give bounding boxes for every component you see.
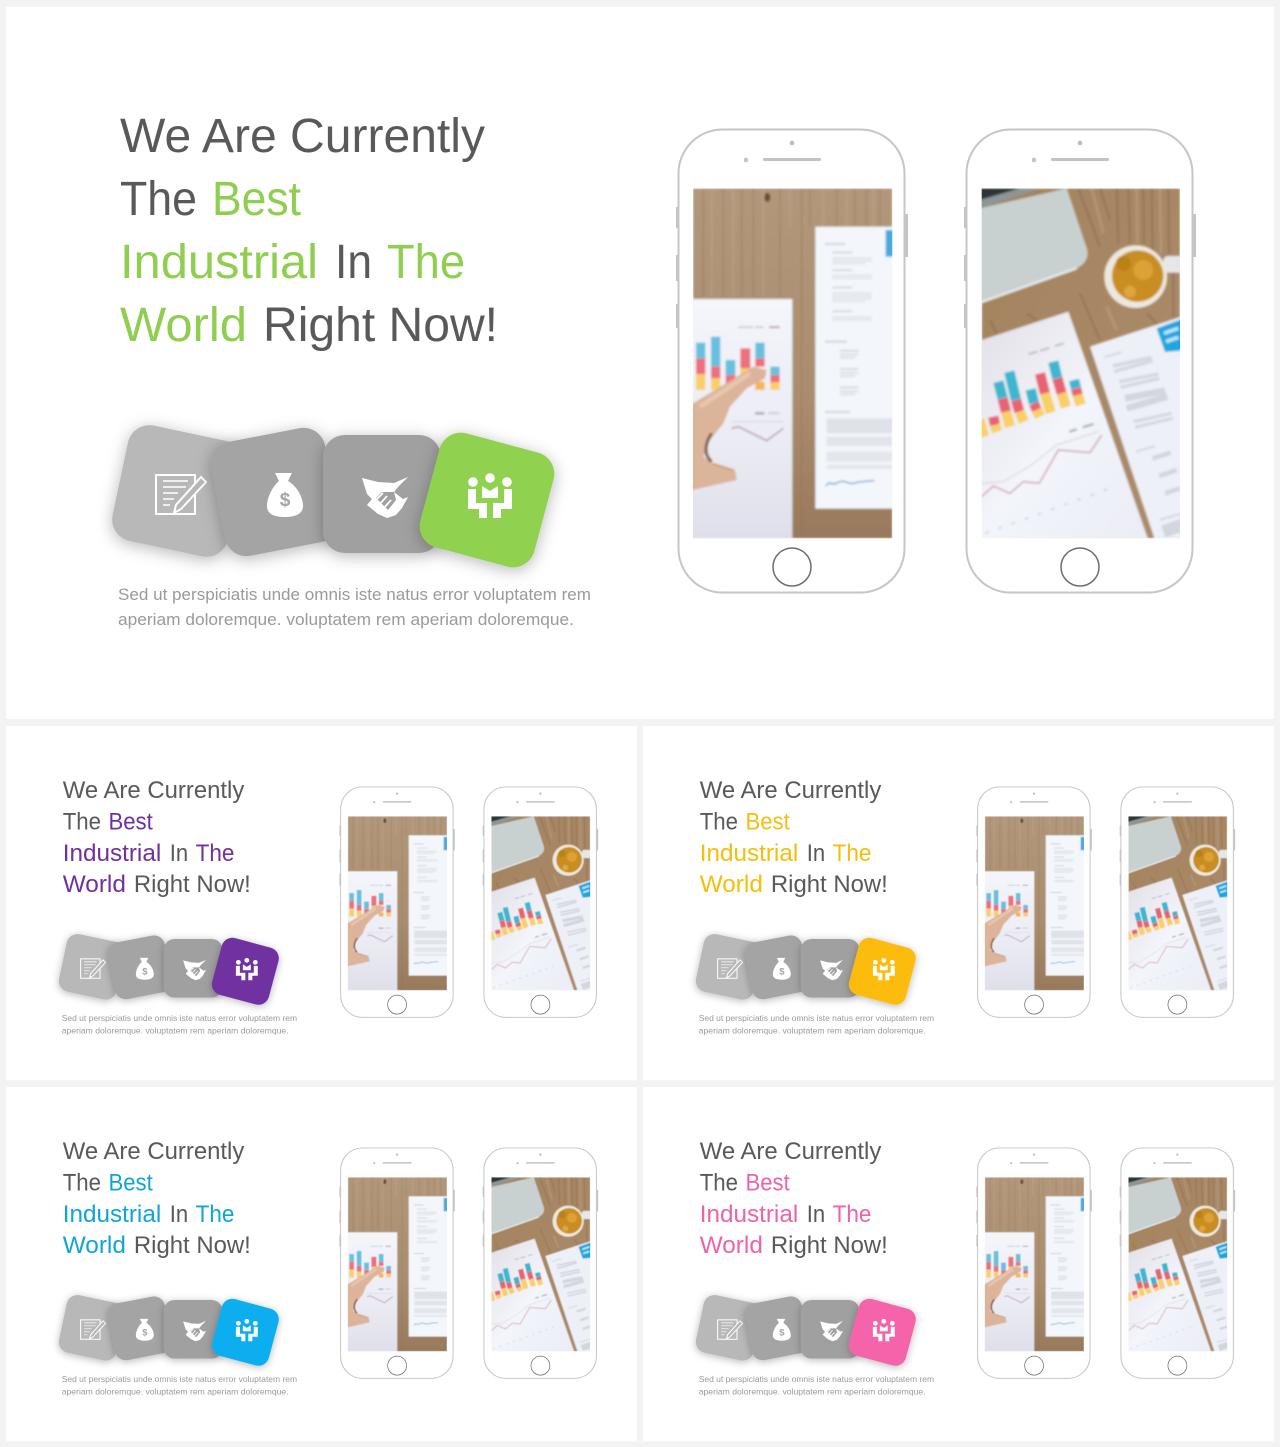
phone: right xyxy=(483,787,598,1017)
heading: Right Now! xyxy=(771,871,888,898)
phone: right xyxy=(483,1148,598,1378)
slide background xyxy=(6,726,637,1080)
slide: pink xyxy=(643,1087,1274,1441)
body text xyxy=(699,1374,934,1396)
heading: Best xyxy=(745,808,790,835)
body text xyxy=(62,1374,297,1396)
icon tile: people, accent xyxy=(846,1296,918,1368)
heading: The xyxy=(700,1169,738,1196)
icon tiles: grey xyxy=(57,932,222,1002)
body text: Sed ut perspiciatis unde omnis iste natus error voluptatem rem xyxy=(699,1374,934,1384)
body text xyxy=(699,1013,934,1036)
heading: Industrial xyxy=(63,840,161,867)
heading: Industrial xyxy=(120,236,318,289)
heading: The xyxy=(700,808,738,835)
heading: Right Now! xyxy=(263,299,498,352)
heading: Best xyxy=(109,1169,153,1196)
heading: Right Now! xyxy=(134,871,251,898)
phone: left xyxy=(676,130,908,592)
heading: Industrial xyxy=(63,1201,161,1228)
icon tiles: grey xyxy=(694,1293,859,1363)
phone: left xyxy=(339,787,455,1017)
phone: left xyxy=(976,1148,1092,1378)
heading: World xyxy=(700,871,763,898)
heading: In xyxy=(807,840,825,867)
body text: aperiam doloremque. voluptatem rem aperiam doloremque. xyxy=(699,1386,926,1396)
heading xyxy=(63,1138,251,1259)
heading: The xyxy=(833,840,871,867)
body text xyxy=(118,585,591,629)
icon tile: people, accent xyxy=(415,428,559,572)
slide background xyxy=(643,726,1274,1080)
phone: right xyxy=(964,130,1196,592)
body text: aperiam doloremque. voluptatem rem aperiam doloremque. xyxy=(62,1025,289,1035)
heading: We Are Currently xyxy=(700,1138,881,1165)
icon tile: people, accent xyxy=(209,935,281,1007)
heading xyxy=(63,777,251,898)
body text: Sed ut perspiciatis unde omnis iste natus error voluptatem rem xyxy=(699,1013,934,1023)
slide: blue xyxy=(6,1087,637,1441)
heading: We Are Currently xyxy=(63,1138,244,1165)
heading: In xyxy=(170,840,188,867)
heading xyxy=(120,110,498,352)
heading: Best xyxy=(109,808,153,835)
icon tile: people, accent xyxy=(846,935,918,1007)
heading: We Are Currently xyxy=(63,777,244,804)
heading: We Are Currently xyxy=(120,110,485,163)
phone: left xyxy=(976,787,1092,1017)
heading: In xyxy=(807,1201,825,1228)
body text xyxy=(62,1013,297,1036)
heading: Right Now! xyxy=(771,1232,888,1259)
heading: The xyxy=(387,236,465,289)
heading: The xyxy=(196,840,234,867)
slide: green main xyxy=(6,7,1274,719)
heading: Best xyxy=(745,1169,790,1196)
heading: Industrial xyxy=(700,1201,798,1228)
icon tiles: grey xyxy=(694,932,859,1002)
heading xyxy=(700,1138,888,1259)
heading: World xyxy=(63,1232,126,1259)
heading: The xyxy=(833,1201,871,1228)
body text: aperiam doloremque. voluptatem rem aperiam doloremque. xyxy=(118,610,574,629)
heading: In xyxy=(170,1201,188,1228)
icon tile: people, accent xyxy=(209,1296,281,1368)
heading: Best xyxy=(212,173,301,226)
heading: Industrial xyxy=(700,840,798,867)
heading: World xyxy=(700,1232,763,1259)
body text: Sed ut perspiciatis unde omnis iste natus error voluptatem rem xyxy=(118,585,591,604)
heading: We Are Currently xyxy=(700,777,881,804)
slide: yellow xyxy=(643,726,1274,1080)
heading: The xyxy=(63,1169,101,1196)
body text: aperiam doloremque. voluptatem rem aperiam doloremque. xyxy=(62,1386,289,1396)
icon tiles: grey xyxy=(108,421,441,561)
heading: The xyxy=(196,1201,234,1228)
heading: World xyxy=(63,871,126,898)
slide: purple xyxy=(6,726,637,1080)
icon tiles: grey xyxy=(57,1293,222,1363)
heading: Right Now! xyxy=(134,1232,251,1259)
heading: The xyxy=(120,173,197,226)
body text: Sed ut perspiciatis unde omnis iste natus error voluptatem rem xyxy=(62,1374,297,1384)
phone: left xyxy=(339,1148,455,1378)
phone: right xyxy=(1120,1148,1235,1378)
body text: Sed ut perspiciatis unde omnis iste natus error voluptatem rem xyxy=(62,1013,297,1023)
phone: right xyxy=(1120,787,1235,1017)
body text: aperiam doloremque. voluptatem rem aperiam doloremque. xyxy=(699,1025,926,1035)
heading: In xyxy=(335,236,372,289)
slide background xyxy=(6,1087,637,1441)
heading: World xyxy=(120,299,247,352)
slide background xyxy=(6,7,1274,719)
heading xyxy=(700,777,888,898)
slide background xyxy=(643,1087,1274,1441)
heading: The xyxy=(63,808,101,835)
